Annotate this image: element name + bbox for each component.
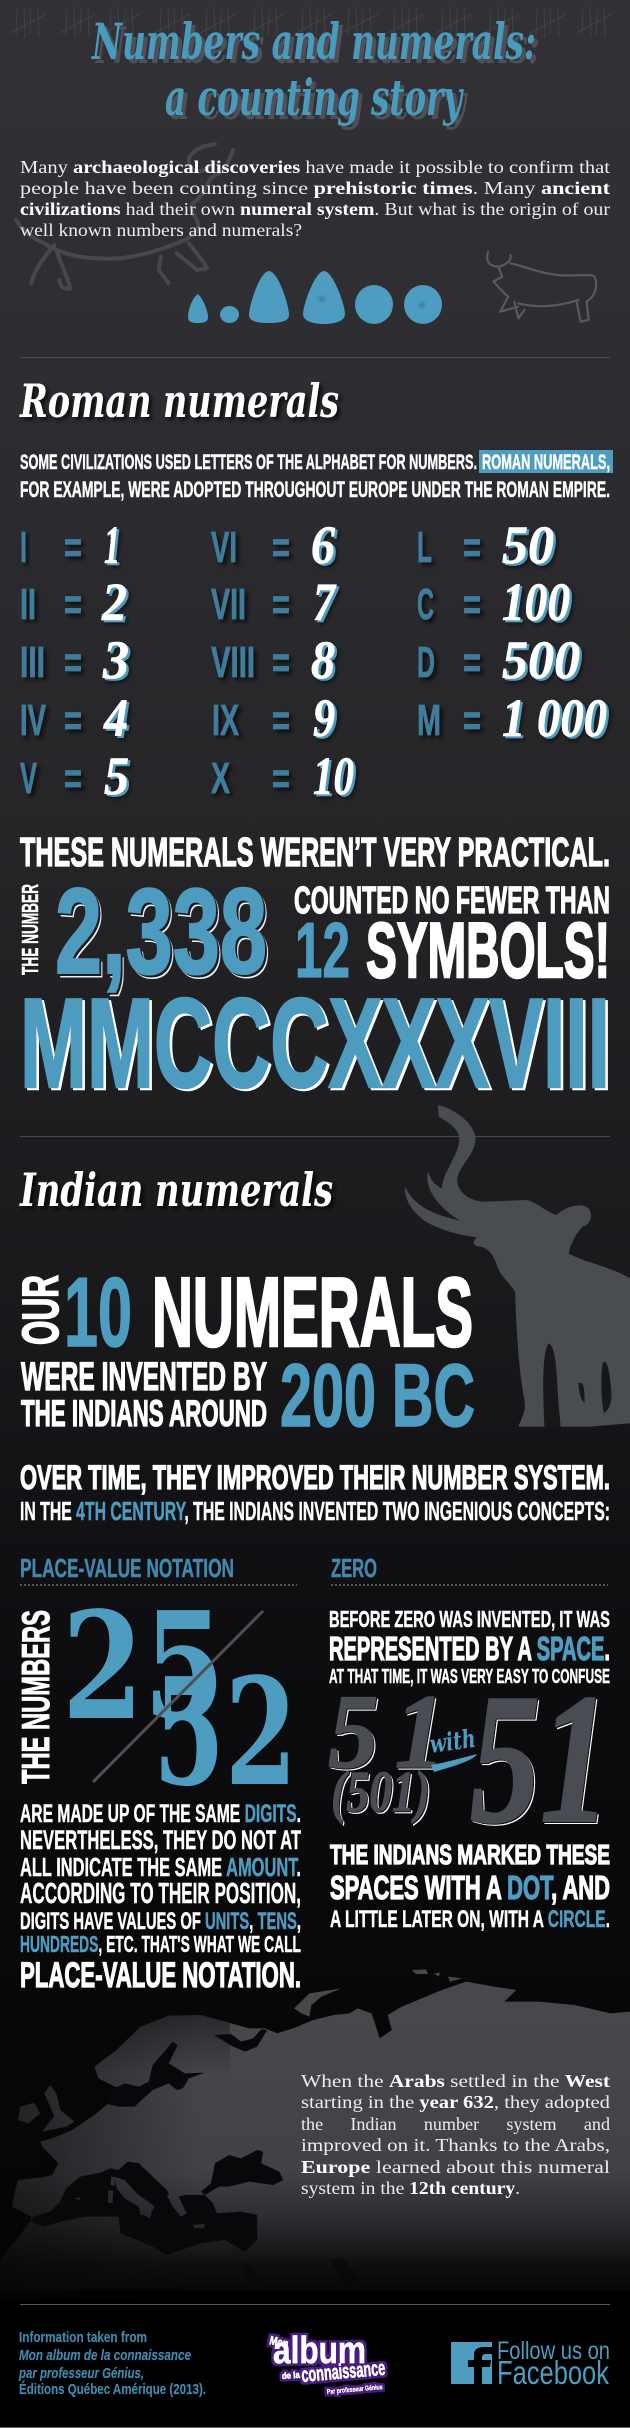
column: I to V: V: [20, 754, 37, 803]
column: VI to X: VI: [211, 523, 237, 572]
logo: Mon album de la connaissance: Par professeur Génius: [327, 2384, 383, 2396]
column: I to V: 3: [102, 630, 129, 690]
column: I to V: =: [64, 523, 82, 572]
icon: counting stones: [188, 271, 442, 324]
tally marks decoration: [10, 6, 612, 38]
column: VI to X: =: [272, 638, 290, 687]
rotated label: our: OUR: [12, 1275, 69, 1345]
column: I to V: =: [64, 696, 82, 745]
column: I to V: IV: [20, 696, 46, 745]
source credit: [18, 2329, 206, 2398]
column: VI to X: VIII: [211, 638, 255, 687]
follow us on Facebook: [497, 2337, 610, 2391]
title: a counting story: [165, 68, 464, 127]
intro text block: well known numbers and numerals?: [20, 220, 302, 240]
column: VI to X: IX: [212, 696, 239, 745]
logo: Mon album de la connaissance: [268, 2330, 386, 2396]
51 (501) with 51 comparison: 51: [328, 1674, 445, 1791]
column: VI to X: =: [272, 523, 290, 572]
source credit: Éditions Québec Amérique (2013).: [19, 2381, 206, 2398]
column: VI to X: 7: [313, 572, 337, 632]
column: I to V: =: [64, 638, 82, 687]
big numbers 25 and 52: 52: [153, 1645, 297, 1819]
icon: elephant silhouette: [405, 1105, 630, 1427]
Arabs text block: When the Arabs settled in the West: [301, 2071, 610, 2091]
source credit: Mon album de la connaissance: [19, 2347, 191, 2364]
column: VI to X: 9: [313, 688, 335, 748]
logo: Mon album de la connaissance: Mon: [268, 2333, 290, 2351]
column: I to V: =: [64, 580, 82, 629]
column: L to M: 500: [502, 630, 580, 690]
51 (501) with 51 comparison: (501): [331, 1759, 430, 1824]
zero conclusion text: [330, 1839, 610, 1933]
place-value text block: HUNDREDS, ETC. THAT'S WHAT WE CALL: [20, 1931, 301, 1957]
column: VI to X: 10: [313, 746, 354, 806]
heading: place-value notation: PLACE-VALUE NOTATION: [20, 1553, 234, 1583]
Arabs text block: system in the 12th century .: [301, 2178, 520, 2198]
heading: Indian numerals: Indian numerals: [19, 1163, 333, 1217]
column: L to M: =: [463, 580, 481, 629]
heading: Roman numerals: Roman numerals: [19, 374, 339, 428]
column: I to V: =: [64, 754, 82, 803]
logo: Mon album de la connaissance: connaissance: [300, 2357, 386, 2387]
source credit: par professeur Génius,: [18, 2365, 144, 2382]
51 (501) with 51 comparison: with: [428, 1724, 477, 1759]
column: L to M: L: [417, 523, 432, 572]
heading: zero: ZERO: [331, 1553, 377, 1583]
Arabs text block: [301, 2071, 610, 2198]
10 numerals: [64, 1257, 473, 1367]
12 symbols: 12: [295, 906, 350, 994]
icon: Facebook logo: [451, 2342, 492, 2384]
column: L to M: 100: [502, 572, 570, 632]
column: L to M: M: [417, 696, 441, 745]
icon: left cave painting bull: [16, 144, 233, 289]
column: VI to X: X: [211, 754, 230, 803]
51 (501) with 51 comparison: [328, 1656, 610, 1862]
Arabs text block: Europe learned about this numeral: [301, 2157, 610, 2177]
column: L to M: [417, 515, 607, 748]
title: [91, 12, 536, 127]
logo: Mon album de la connaissance: album: [273, 2330, 366, 2372]
map of Europe: [0, 1969, 630, 2300]
big number 2,338: 2,338: [55, 863, 267, 999]
place-value text block: NEVERTHELESS, THEY DO NOT AT: [20, 1825, 301, 1855]
place-value text block: [20, 1800, 301, 1995]
column: L to M: C: [417, 580, 434, 629]
column: I to V: 4: [103, 688, 128, 748]
Arabs text block: the Indian number system and: [301, 2114, 610, 2134]
column: L to M: =: [463, 696, 481, 745]
column: VI to X: =: [272, 696, 290, 745]
invented by the Indians: WERE INVENTED BY: [21, 1355, 267, 1399]
column: L to M: D: [417, 638, 435, 687]
200 BC: 200 BC: [280, 1345, 475, 1445]
invented by the Indians: THE INDIANS AROUND: [21, 1393, 267, 1434]
column: I to V: II: [20, 580, 36, 629]
source credit: Information taken from: [19, 2329, 147, 2346]
intro text block: people have been counting since prehistoric times . Many ancient: [20, 178, 610, 198]
column: VI to X: [211, 515, 354, 806]
column: I to V: I: [20, 523, 27, 572]
table of Roman numerals: [20, 515, 607, 806]
intro text block: [20, 157, 610, 240]
column: VI to X: =: [272, 580, 290, 629]
column: I to V: 1: [104, 515, 120, 575]
Arabs text block: starting in the year 632 , they adopted: [301, 2092, 610, 2112]
Arabs text block: improved on it. Thanks to the Arabs,: [301, 2135, 610, 2155]
column: L to M: =: [463, 638, 481, 687]
rotated label: the number: THE NUMBER: [17, 884, 43, 975]
column: L to M: 50: [502, 515, 554, 575]
rotated label: the numbers: THE NUMBERS: [15, 1610, 58, 1784]
place-value text block: PLACE-VALUE NOTATION.: [20, 1956, 301, 1995]
icon: right cave painting bull: [487, 252, 596, 322]
invented by the Indians: [21, 1355, 267, 1434]
10 numerals: 10: [64, 1257, 132, 1367]
column: VI to X: 6: [311, 515, 335, 575]
place-value text block: ALL INDICATE THE SAME AMOUNT.: [20, 1852, 301, 1882]
place-value text block: ARE MADE UP OF THE SAME DIGITS.: [20, 1800, 301, 1828]
big numbers 25 and 52: 25: [62, 1579, 225, 1753]
intro text block: civilizations had their own numeral system . But what is the origin of our: [20, 199, 610, 219]
Roman numerals intro text: [20, 450, 613, 502]
place-value text block: DIGITS HAVE VALUES OF UNITS, TENS,: [20, 1908, 301, 1935]
column: VI to X: VII: [211, 580, 246, 629]
intro text block: Many archaeological discoveries have made it possible to confirm that: [20, 157, 610, 177]
place-value text block: ACCORDING TO THEIR POSITION,: [20, 1878, 301, 1910]
column: I to V: III: [20, 638, 45, 687]
column: VI to X: 8: [311, 630, 335, 690]
column: L to M: 1 000: [502, 688, 607, 748]
column: I to V: 5: [104, 746, 129, 806]
column: I to V: [20, 515, 129, 806]
column: I to V: 2: [101, 572, 127, 632]
zero text block: [329, 1606, 610, 1688]
big numbers 25 and 52: [62, 1579, 297, 1819]
over time text: [20, 1459, 610, 1526]
column: VI to X: =: [272, 754, 290, 803]
logo: Mon album de la connaissance: de la: [281, 2370, 301, 2381]
column: L to M: =: [463, 523, 481, 572]
